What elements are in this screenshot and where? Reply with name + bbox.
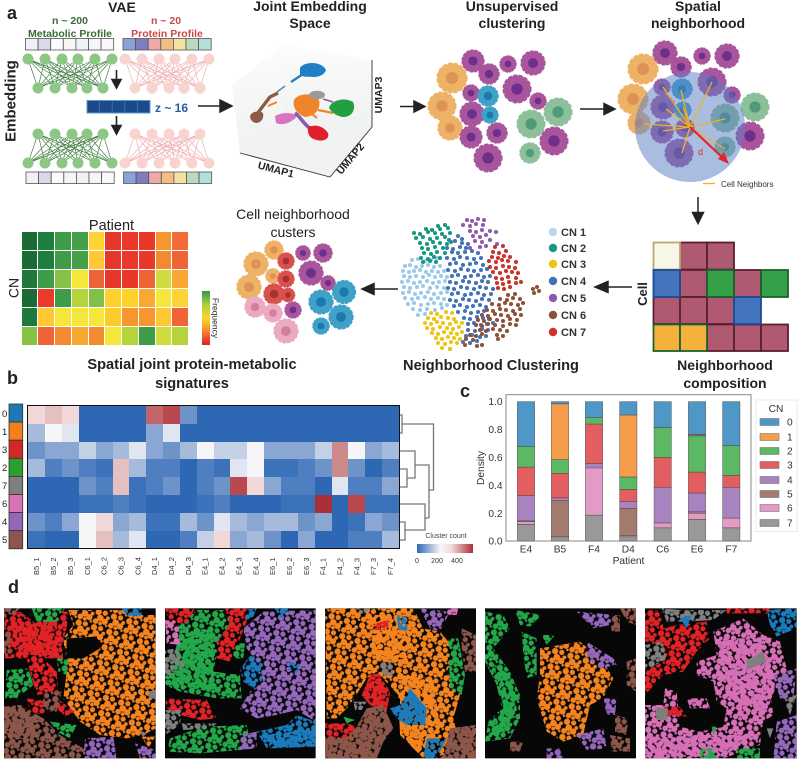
sample tick labels: F7_3 bbox=[369, 558, 378, 575]
cluster count colorbar: Cluster count bbox=[425, 533, 467, 540]
stacked bar chart: 1.0 bbox=[488, 397, 503, 408]
joint embedding heading bbox=[253, 0, 367, 31]
row labels: 0 bbox=[2, 409, 7, 420]
panel c label: c bbox=[460, 381, 470, 401]
sample tick labels: E4_3 bbox=[234, 557, 243, 575]
frequency colorbar bbox=[202, 291, 220, 345]
panel a label: a bbox=[7, 3, 18, 23]
cluster count colorbar bbox=[415, 533, 473, 565]
cluster count colorbar: 200 bbox=[431, 558, 443, 565]
embedding axis label: Embedding bbox=[2, 60, 20, 142]
bar chart legend: 5 bbox=[787, 490, 793, 500]
tissue map 1 bbox=[4, 608, 156, 758]
row labels: 5 bbox=[2, 535, 7, 546]
tissue map 2 bbox=[165, 608, 316, 758]
sample tick labels: C6_3 bbox=[116, 557, 126, 575]
frequency colorbar: Frequency bbox=[210, 298, 220, 339]
unsupervised clustering heading bbox=[466, 0, 558, 31]
arrow to cell neighborhood clusters bbox=[362, 284, 398, 294]
protein input strip bbox=[123, 38, 211, 50]
neighborhood clustering heading: Neighborhood Clustering bbox=[403, 358, 579, 374]
unsupervised clustering heading: clustering bbox=[479, 15, 545, 31]
panel d label: d bbox=[8, 577, 19, 597]
sample tick labels: B5_2 bbox=[49, 557, 58, 575]
protein decoder network bbox=[120, 129, 214, 168]
tissue map 5 bbox=[645, 608, 797, 758]
spatial neighborhood heading: neighborhood bbox=[651, 15, 745, 31]
3D UMAP plot: UMAP3 bbox=[373, 76, 385, 113]
bar chart legend: CN bbox=[769, 404, 783, 415]
tissue map 4 bbox=[485, 608, 636, 758]
cell axis label: Cell bbox=[635, 282, 650, 306]
sample tick labels: E4_1 bbox=[201, 557, 210, 575]
3D UMAP plot bbox=[232, 45, 385, 181]
CN legend: CN 6 bbox=[561, 310, 586, 322]
bar chart legend: 7 bbox=[787, 518, 793, 530]
cell neighbors legend: Cell Neighbors bbox=[721, 180, 773, 189]
cell neighborhood clusters heading: custers bbox=[270, 224, 316, 240]
protein profile heading: n ~ 20 bbox=[151, 15, 181, 27]
stacked bar chart: F4 bbox=[588, 544, 600, 556]
row labels: 6 bbox=[2, 499, 7, 510]
stacked bar chart: Density bbox=[476, 450, 487, 485]
protein profile heading: Protein Profile bbox=[131, 28, 203, 40]
sample tick labels: E6_3 bbox=[302, 557, 311, 575]
CN legend: CN 7 bbox=[561, 327, 586, 339]
cluster count colorbar: 0 bbox=[415, 558, 419, 565]
CN legend bbox=[549, 227, 587, 339]
sample tick labels: C6_4 bbox=[133, 557, 142, 575]
stacked bar chart: 0.6 bbox=[488, 453, 503, 464]
sample tick labels: E4_2 bbox=[218, 557, 227, 575]
arrow down to composition bbox=[692, 197, 704, 224]
stacked bar chart: Patient bbox=[613, 556, 645, 567]
stacked bar chart: 0.4 bbox=[488, 481, 503, 492]
metabolic profile heading: Metabolic Profile bbox=[28, 28, 112, 40]
stacked bar chart: 0.8 bbox=[488, 425, 503, 436]
arrow down to latent bbox=[112, 70, 121, 88]
sample tick labels: B5_3 bbox=[66, 557, 75, 575]
arrow to clustering bbox=[400, 101, 425, 112]
neighborhood composition heading: Neighborhood bbox=[677, 357, 773, 373]
bar chart legend: 2 bbox=[787, 446, 793, 458]
unsupervised cell clusters bbox=[428, 50, 572, 172]
metabolic profile heading bbox=[28, 15, 112, 40]
sample tick labels: D4_2 bbox=[167, 557, 176, 575]
3D UMAP plot: UMAP1 bbox=[256, 160, 295, 181]
CN legend: CN 3 bbox=[561, 259, 586, 271]
stacked bar chart: 0.0 bbox=[488, 536, 503, 548]
stacked bar chart: D4 bbox=[622, 544, 635, 556]
bar chart legend: 6 bbox=[787, 504, 793, 514]
CN legend: CN 1 bbox=[561, 227, 586, 239]
metabolic profile heading: n ~ 200 bbox=[52, 15, 88, 27]
bar chart legend: 3 bbox=[787, 460, 793, 472]
stacked bar chart bbox=[476, 395, 751, 567]
sample tick labels: F4_1 bbox=[319, 558, 328, 575]
CN legend: CN 2 bbox=[561, 243, 586, 255]
dendrogram bbox=[400, 415, 434, 540]
CN legend: CN 4 bbox=[561, 276, 587, 288]
sample tick labels: C6_1 bbox=[83, 557, 92, 575]
sample tick labels bbox=[32, 557, 395, 575]
spatial neighborhood diagram bbox=[618, 41, 769, 182]
protein encoder network bbox=[120, 54, 214, 93]
stacked bar chart: 0.2 bbox=[488, 509, 503, 520]
sample tick labels: D4_3 bbox=[184, 557, 193, 575]
stacked bar chart: E4 bbox=[520, 544, 533, 556]
cluster count colorbar: 400 bbox=[451, 558, 463, 565]
sample tick labels: B5_1 bbox=[32, 557, 41, 575]
sample tick labels: D4_1 bbox=[150, 557, 159, 575]
3D UMAP plot: UMAP2 bbox=[334, 141, 367, 177]
metabolic decoder network bbox=[23, 129, 117, 168]
neighborhood scatter plot bbox=[402, 219, 539, 349]
panel b label: b bbox=[7, 368, 18, 388]
cell neighborhood clusters heading bbox=[236, 206, 350, 240]
sample tick labels: E4_4 bbox=[251, 557, 260, 575]
latent size label: z ~ 16 bbox=[155, 101, 188, 115]
arrow to spatial neighborhood bbox=[580, 104, 615, 114]
bar chart legend bbox=[756, 400, 797, 532]
sample tick labels: C6_2 bbox=[100, 557, 109, 575]
row labels: 7 bbox=[2, 481, 7, 492]
bar chart legend: 1 bbox=[787, 432, 793, 444]
metabolic output strip bbox=[26, 172, 114, 184]
arrow from latent to decoder bbox=[112, 116, 121, 134]
CN axis label: CN bbox=[6, 278, 22, 298]
row cluster colors bbox=[9, 404, 23, 549]
stacked bar chart: C6 bbox=[656, 544, 670, 556]
patient heatmap title: Patient bbox=[89, 218, 134, 234]
metabolic input strip bbox=[26, 38, 114, 50]
tissue map 3 bbox=[325, 608, 476, 758]
neighborhood composition heading bbox=[677, 357, 773, 391]
row labels bbox=[2, 409, 7, 546]
stacked bar chart: E6 bbox=[691, 544, 704, 556]
row labels: 3 bbox=[2, 445, 7, 456]
protein profile heading bbox=[131, 15, 203, 40]
latent vector z bbox=[87, 100, 150, 113]
spatial neighborhood diagram: d bbox=[698, 147, 703, 157]
signatures heading: Spatial joint protein-metabolic bbox=[87, 357, 297, 373]
bar chart legend: 4 bbox=[787, 476, 793, 486]
protein output strip bbox=[124, 172, 212, 184]
cell neighborhood clusters heading: Cell neighborhood bbox=[236, 206, 350, 222]
cell neighborhood clusters diagram bbox=[237, 241, 355, 343]
sample tick labels: F4_2 bbox=[336, 558, 344, 575]
row labels: 2 bbox=[2, 463, 7, 474]
cluster count heatmap bbox=[27, 405, 400, 549]
signatures heading: signatures bbox=[155, 376, 229, 392]
stacked bar chart: B5 bbox=[554, 544, 567, 556]
bar chart legend: 0 bbox=[787, 418, 793, 428]
sample tick labels: F7_4 bbox=[386, 558, 395, 575]
spatial neighborhood heading bbox=[651, 0, 745, 31]
sample tick labels: F4_3 bbox=[352, 558, 361, 575]
metabolic encoder network bbox=[23, 54, 117, 93]
row labels: 4 bbox=[2, 517, 7, 528]
sample tick labels: E6_2 bbox=[285, 557, 294, 575]
patient by CN frequency heatmap bbox=[22, 232, 188, 345]
arrow to neighborhood clustering bbox=[595, 282, 632, 292]
signatures heading bbox=[87, 357, 297, 392]
neighborhood composition grid bbox=[654, 242, 788, 351]
CN legend: CN 5 bbox=[561, 293, 586, 305]
stacked bar chart: F7 bbox=[725, 544, 738, 556]
arrow to joint embedding bbox=[198, 100, 232, 112]
neighborhood composition heading: composition bbox=[683, 375, 767, 391]
joint embedding heading: Space bbox=[289, 15, 331, 31]
sample tick labels: E6_1 bbox=[268, 557, 277, 575]
row labels: 1 bbox=[2, 427, 7, 438]
